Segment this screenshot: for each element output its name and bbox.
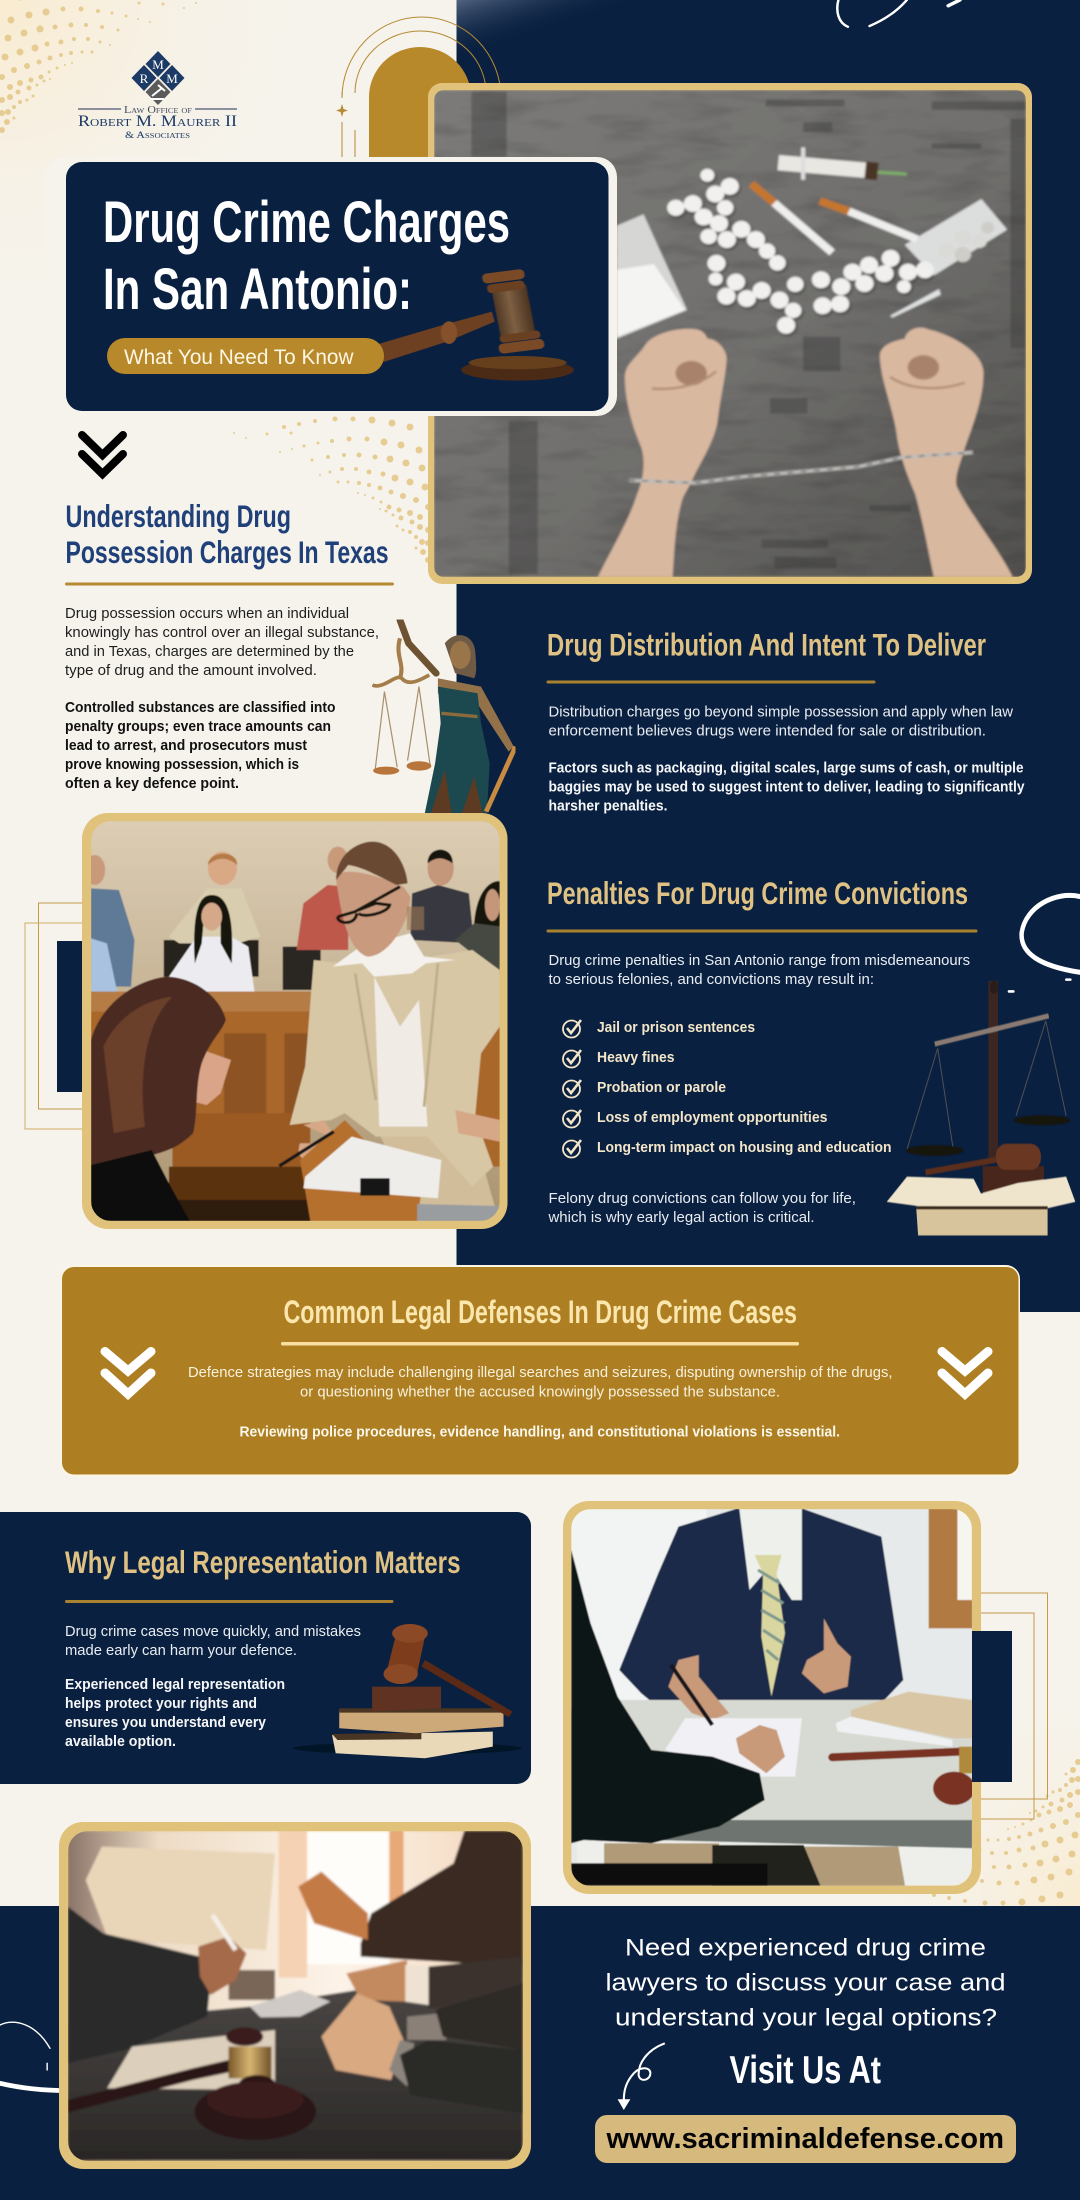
text: experienced representation: Experienced legal representation — [65, 1676, 285, 1693]
icon: right white chevrons — [942, 1352, 988, 1394]
table — [68, 1990, 523, 2161]
photo: gavel at meeting — [59, 1822, 531, 2169]
text: cta question: understand your legal options? — [615, 2004, 997, 2032]
list item: probation — [563, 1079, 726, 1098]
text: cta question: lawyers to discuss your case and — [606, 1970, 1006, 1996]
logo: & Associates — [125, 131, 190, 141]
icon: scales with books — [887, 980, 1075, 1236]
decorative white swirl left — [0, 2022, 68, 2091]
text: why description: made early can harm your defence. — [65, 1642, 297, 1659]
list item: probation: Probation or parole — [597, 1079, 726, 1096]
left person — [68, 1907, 211, 2063]
text: penalties intro — [548, 952, 970, 988]
text: possession description — [65, 605, 379, 679]
right arm and hands — [346, 1960, 407, 2002]
logo: Law Office of — [124, 105, 192, 116]
gavel — [832, 1752, 961, 1757]
pill: subtitle: What You Need To Know — [124, 346, 354, 369]
list item: employment: Loss of employment opportunities — [597, 1109, 828, 1126]
text: intent factors: harsher penalties. — [548, 798, 668, 814]
text: distribution description: enforcement believes drugs were intended for sale or distribution. — [548, 722, 986, 740]
text: controlled substances: penalty groups; even trace amounts can — [65, 718, 331, 735]
heading: title: In San Antonio: — [103, 257, 412, 322]
text: experienced representation: available option. — [65, 1733, 176, 1750]
icon: left white chevrons — [105, 1352, 151, 1394]
pills — [667, 169, 934, 334]
heading: title: Drug Crime Charges — [103, 190, 510, 255]
text: possession description: type of drug and the amount involved. — [65, 662, 317, 679]
panel: why legal representation — [0, 1512, 531, 1784]
gavel — [68, 2060, 232, 2113]
list item: fines: Heavy fines — [597, 1049, 674, 1066]
heading: understanding possession — [66, 498, 388, 570]
decorative right frames — [965, 1593, 1048, 1819]
logo — [78, 51, 237, 141]
suit — [619, 1509, 903, 1713]
text: controlled substances: lead to arrest, and prosecutors must — [65, 737, 307, 754]
text: felony note: which is why early legal action is critical. — [548, 1209, 814, 1226]
client — [571, 1550, 765, 1843]
text: penalties intro: to serious felonies, and convictions may result in: — [548, 971, 874, 988]
documents — [665, 1718, 802, 1777]
icon: gavel on books — [293, 1624, 521, 1758]
decorative white squiggle top right — [837, 0, 960, 27]
text: experienced representation: helps protect your rights and — [65, 1695, 257, 1712]
decorative left frames — [25, 903, 90, 1129]
pill: subtitle — [107, 338, 384, 374]
text: experienced representation — [65, 1676, 285, 1750]
text: distribution description: Distribution charges go beyond simple possession and apply when law — [548, 704, 1013, 720]
right person upper — [361, 1831, 523, 1967]
text: why description: Drug crime cases move quickly, and mistakes — [65, 1623, 361, 1640]
right fist and arm — [880, 328, 1013, 577]
text: distribution description — [548, 704, 1013, 740]
logo emblem: M — [166, 71, 178, 86]
text: defense strategies: Defence strategies may include challenging illegal searches and seizures, disputing ownership of the drugs, — [188, 1364, 892, 1381]
button: website — [595, 2115, 1016, 2163]
panel: title — [45, 157, 617, 416]
icon: lady justice statue — [372, 620, 515, 813]
list item: jail: Jail or prison sentences — [597, 1019, 755, 1036]
section: drug distribution — [546, 626, 1025, 814]
table — [619, 1700, 972, 1823]
jury members — [91, 888, 134, 987]
call to action — [595, 1934, 1016, 2163]
logo emblem: R — [140, 71, 149, 86]
heading: title — [103, 190, 510, 322]
decorative gold arch — [336, 17, 501, 165]
button: website: www.sacriminaldefense.com — [605, 2123, 1004, 2155]
decorative white swirl right — [1009, 895, 1080, 991]
logo: Robert M. Maurer II — [78, 113, 237, 130]
wood panels — [91, 992, 319, 1115]
heading: defenses: Common Legal Defenses In Drug Crime Cases — [284, 1294, 797, 1330]
list item: housing: Long-term impact on housing and education — [597, 1139, 892, 1156]
panel: navy right background — [456, 0, 1080, 1312]
notebooks — [851, 1692, 972, 1738]
list item: fines — [563, 1049, 674, 1068]
handcuffs chain — [629, 452, 973, 483]
brunette woman — [196, 1051, 232, 1106]
icon: gavel — [376, 268, 574, 381]
text: controlled substances: Controlled substances are classified into — [65, 699, 336, 716]
lawyer — [380, 1136, 495, 1206]
heading: why representation: Why Legal Representation Matters — [65, 1544, 460, 1580]
photo: courtroom — [82, 813, 508, 1229]
text: intent factors: Factors such as packaging, digital scales, large sums of cash, or multiple — [548, 760, 1024, 776]
arrow: curly — [618, 2043, 665, 2110]
pill bottle — [905, 199, 1007, 276]
text: why description — [65, 1623, 361, 1659]
text: controlled substances: prove knowing possession, which is — [65, 756, 299, 773]
icon: black double chevron — [82, 435, 123, 474]
heading: understanding possession: Understanding Drug — [66, 498, 291, 534]
text: defense strategies: or questioning whether the accused knowingly possessed the substance. — [300, 1384, 780, 1400]
notebook — [107, 2030, 275, 2090]
photo: hands in cuffs with pills — [428, 83, 1032, 584]
panel: common legal defenses — [60, 1265, 1020, 1476]
text: intent factors — [548, 760, 1025, 814]
syringe — [778, 163, 865, 170]
podium — [300, 1120, 421, 1221]
text: controlled substances: often a key defence point. — [65, 775, 239, 792]
text: felony note: Felony drug convictions can follow you for life, — [548, 1190, 856, 1207]
list: penalties — [563, 1019, 892, 1158]
text: defense strategies — [188, 1364, 892, 1400]
photo: attorney consultation — [563, 1501, 981, 1894]
text: controlled substances — [65, 699, 336, 792]
text: possession description: and in Texas, charges are determined by the — [65, 643, 354, 660]
text: felony note — [548, 1190, 856, 1226]
text: cta question: Need experienced drug crime — [625, 1934, 986, 1962]
concrete streaks — [471, 92, 1026, 574]
text: possession description: Drug possession occurs when an individual — [65, 605, 349, 622]
left fist and arm — [598, 329, 727, 577]
panel: bottom navy section — [0, 1906, 1080, 2200]
hand with pen — [668, 1655, 729, 1720]
heading: understanding possession: Possession Charges In Texas — [66, 534, 388, 570]
logo emblem: M — [152, 57, 164, 72]
cigarettes — [751, 184, 774, 203]
text: intent factors: baggies may be used to suggest intent to deliver, leading to significantly — [548, 778, 1025, 796]
text: reviewing procedures: Reviewing police procedures, evidence handling, and constitutional violations is essential. — [240, 1424, 840, 1440]
section: penalties — [546, 875, 978, 1226]
papers — [303, 1137, 441, 1198]
text: possession description: knowingly has control over an illegal substance, — [65, 624, 379, 641]
heading: visit us at: Visit Us At — [730, 2049, 881, 2092]
text: cta question — [606, 1934, 1006, 2032]
text: penalties intro: Drug crime penalties in San Antonio range from misdemeanours — [548, 952, 970, 969]
bag of powder — [617, 214, 687, 339]
text: experienced representation: ensures you understand every — [65, 1714, 267, 1731]
section: understanding possession — [65, 498, 394, 792]
logo emblem — [132, 51, 184, 105]
